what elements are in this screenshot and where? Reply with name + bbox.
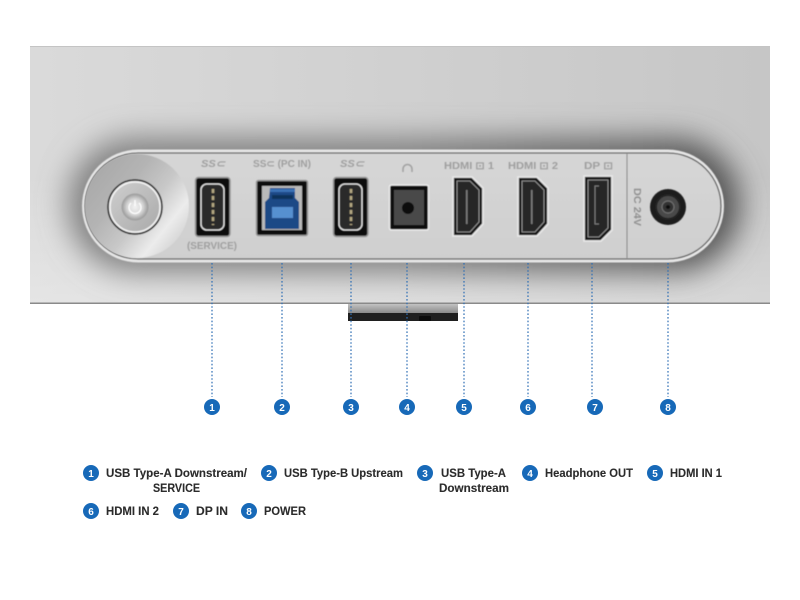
numbered port markers: 7 bbox=[592, 403, 598, 414]
port 6: HDMI 2: HDMI ⊡ 2 bbox=[508, 161, 558, 172]
legend item 1: USB Type-A Downstream/ bbox=[106, 468, 248, 480]
legend item 4 bbox=[522, 465, 633, 481]
legend bbox=[83, 465, 723, 519]
legend item 4: 4 bbox=[527, 469, 533, 480]
monitor stand bracket bbox=[348, 304, 458, 321]
numbered port markers: 2 bbox=[279, 403, 285, 414]
legend item 2: USB Type-B Upstream bbox=[284, 468, 403, 480]
port 3: USB Type-A bbox=[334, 159, 368, 236]
port 3: USB Type-A: SS⊂ bbox=[340, 159, 366, 170]
numbered port markers: 3 bbox=[348, 403, 354, 414]
numbered port markers bbox=[204, 399, 676, 415]
numbered port markers: 4 bbox=[404, 403, 410, 414]
legend item 8 bbox=[241, 503, 307, 519]
port 7: DisplayPort: DP ⊡ bbox=[584, 161, 613, 172]
legend item 7: DP IN bbox=[196, 506, 228, 518]
legend item 5: HDMI IN 1 bbox=[670, 468, 723, 480]
numbered port markers: 5 bbox=[461, 403, 467, 414]
port 7: DisplayPort bbox=[584, 161, 613, 241]
legend item 6: 6 bbox=[88, 507, 94, 518]
legend item 3: USB Type-A bbox=[441, 468, 506, 480]
port 8: DC 24V power jack: DC 24V bbox=[631, 188, 642, 226]
numbered port markers: 6 bbox=[525, 403, 531, 414]
legend item 8: 8 bbox=[246, 507, 252, 518]
legend item 3 bbox=[417, 465, 509, 495]
port 8: DC 24V power jack bbox=[631, 188, 686, 226]
legend item 2: 2 bbox=[266, 469, 272, 480]
port 5: HDMI 1: HDMI ⊡ 1 bbox=[444, 161, 494, 172]
port 2: USB Type-B: SS⊂ (PC IN) bbox=[253, 159, 311, 170]
legend item 1: 1 bbox=[88, 469, 94, 480]
legend item 5 bbox=[647, 465, 723, 481]
legend item 7: 7 bbox=[178, 507, 184, 518]
legend item 4: Headphone OUT bbox=[545, 468, 633, 480]
legend item 6: HDMI IN 2 bbox=[106, 506, 159, 518]
legend item 6 bbox=[83, 503, 159, 519]
legend item 1: SERVICE bbox=[153, 483, 200, 495]
port 6: HDMI 2 bbox=[508, 161, 558, 236]
numbered port markers: 8 bbox=[665, 403, 671, 414]
port 1: USB Type-A service: SS⊂ bbox=[201, 159, 227, 170]
port 1: USB Type-A service bbox=[187, 159, 237, 252]
power button bbox=[85, 154, 189, 258]
port 4: headphone jack bbox=[390, 164, 428, 230]
port 2: USB Type-B bbox=[253, 159, 311, 236]
legend item 1 bbox=[83, 465, 248, 495]
legend item 8: POWER bbox=[264, 506, 307, 518]
legend item 2 bbox=[261, 465, 403, 481]
legend item 3: Downstream bbox=[439, 483, 509, 495]
monitor back panel bbox=[30, 46, 770, 304]
legend item 7 bbox=[173, 503, 228, 519]
numbered port markers: 1 bbox=[209, 403, 215, 414]
legend item 5: 5 bbox=[652, 469, 658, 480]
port 5: HDMI 1 bbox=[444, 161, 494, 236]
connector leader lines bbox=[212, 263, 668, 397]
legend item 3: 3 bbox=[422, 469, 428, 480]
port pill panel bbox=[82, 150, 724, 262]
port 1: USB Type-A service: (SERVICE) bbox=[187, 241, 237, 252]
